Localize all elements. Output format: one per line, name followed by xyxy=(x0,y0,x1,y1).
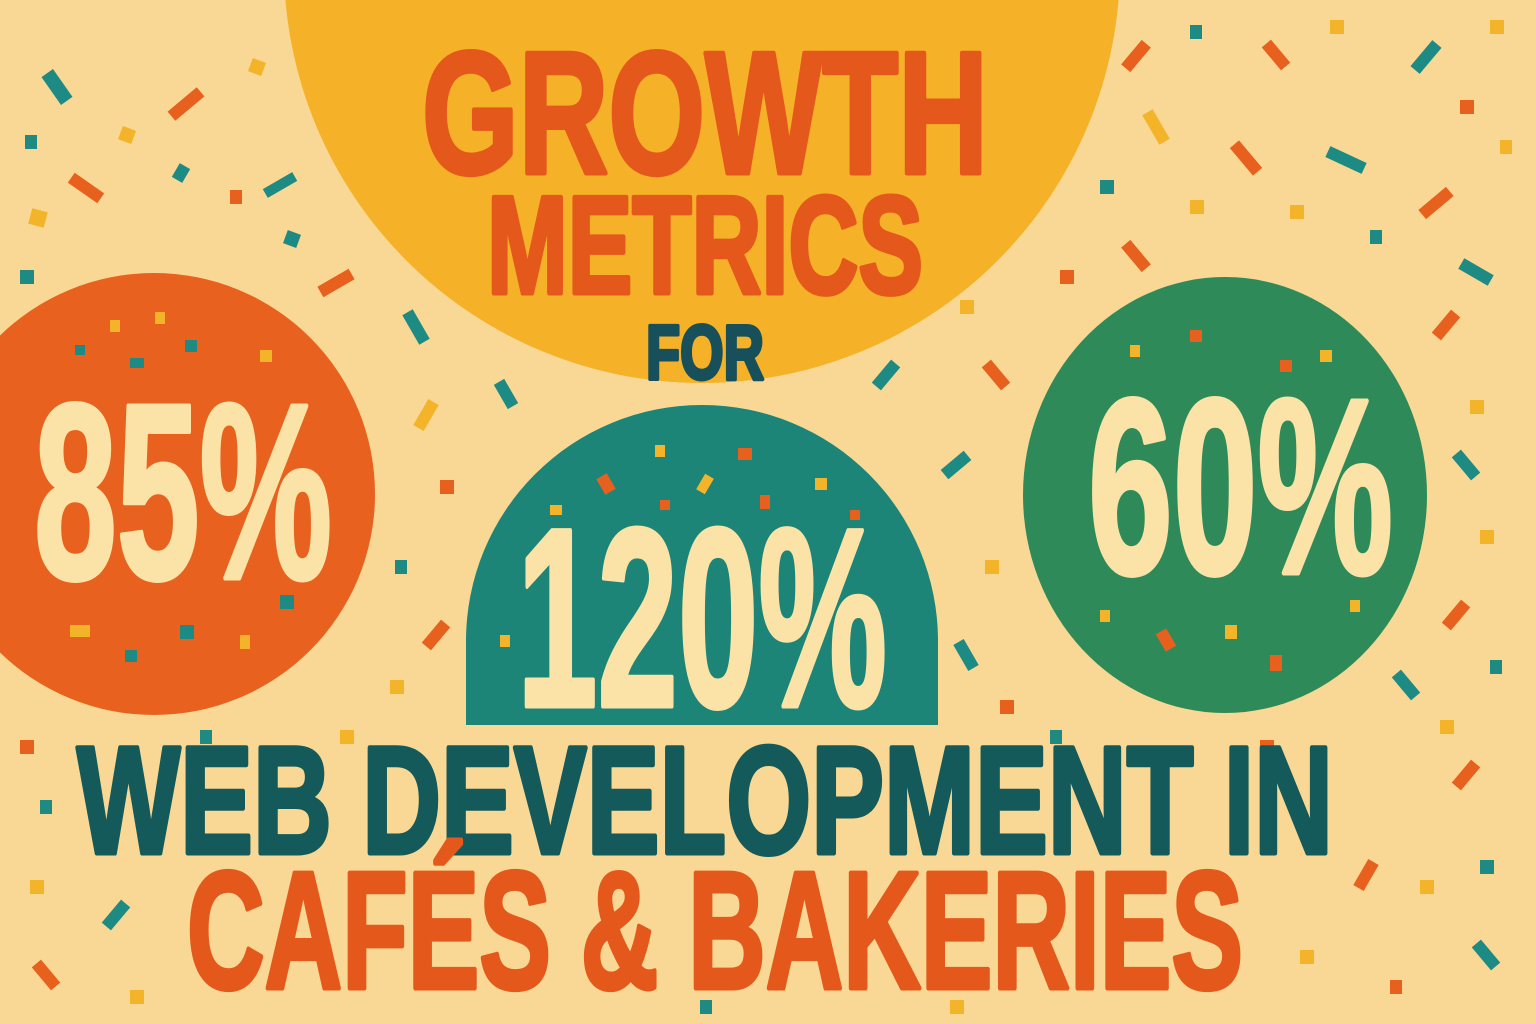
title background circle xyxy=(284,0,1120,383)
title: Growth Metrics for: FOR xyxy=(646,310,764,396)
title: Growth Metrics for: METRICS xyxy=(487,168,923,323)
stat: 120%: 120% xyxy=(517,476,887,761)
title: Growth Metrics for: GROWTH xyxy=(422,15,988,210)
stat: 85%: 85% xyxy=(34,352,332,631)
panel: 85% circle xyxy=(0,273,375,715)
panel: 60% circle xyxy=(1023,277,1427,713)
panel: 120% half circle xyxy=(466,405,938,761)
title: Growth Metrics for xyxy=(422,15,988,396)
